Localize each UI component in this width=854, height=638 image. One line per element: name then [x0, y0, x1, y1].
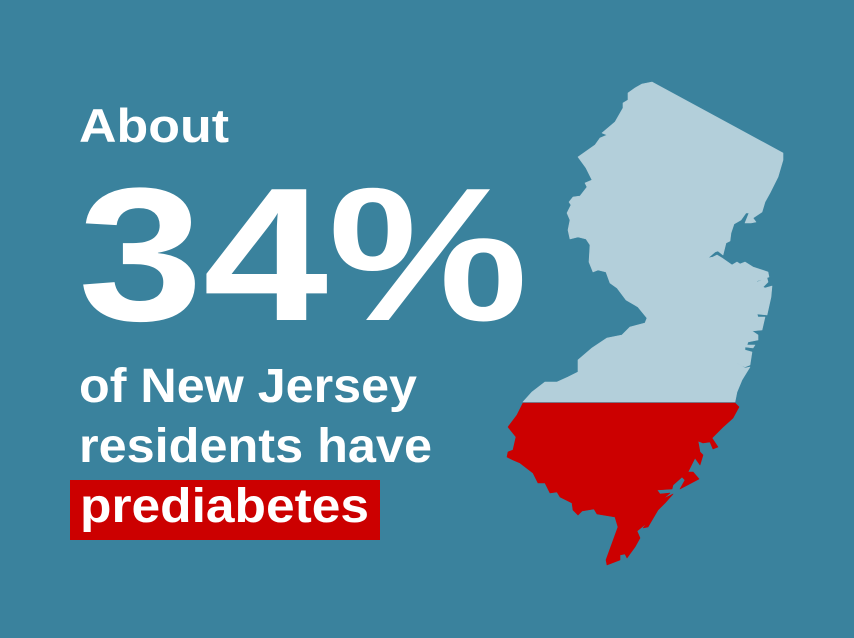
map: New Jersey [507, 82, 783, 565]
text: residents have: residents have [79, 420, 432, 473]
highlight: prediabetes: prediabetes [80, 480, 369, 533]
statistic: 34%: 34% [78, 149, 528, 361]
text: About: About [79, 99, 229, 152]
map: southern region, red [507, 403, 739, 565]
map: northern region, light blue [523, 82, 783, 402]
text: of New Jersey: of New Jersey [79, 360, 417, 413]
